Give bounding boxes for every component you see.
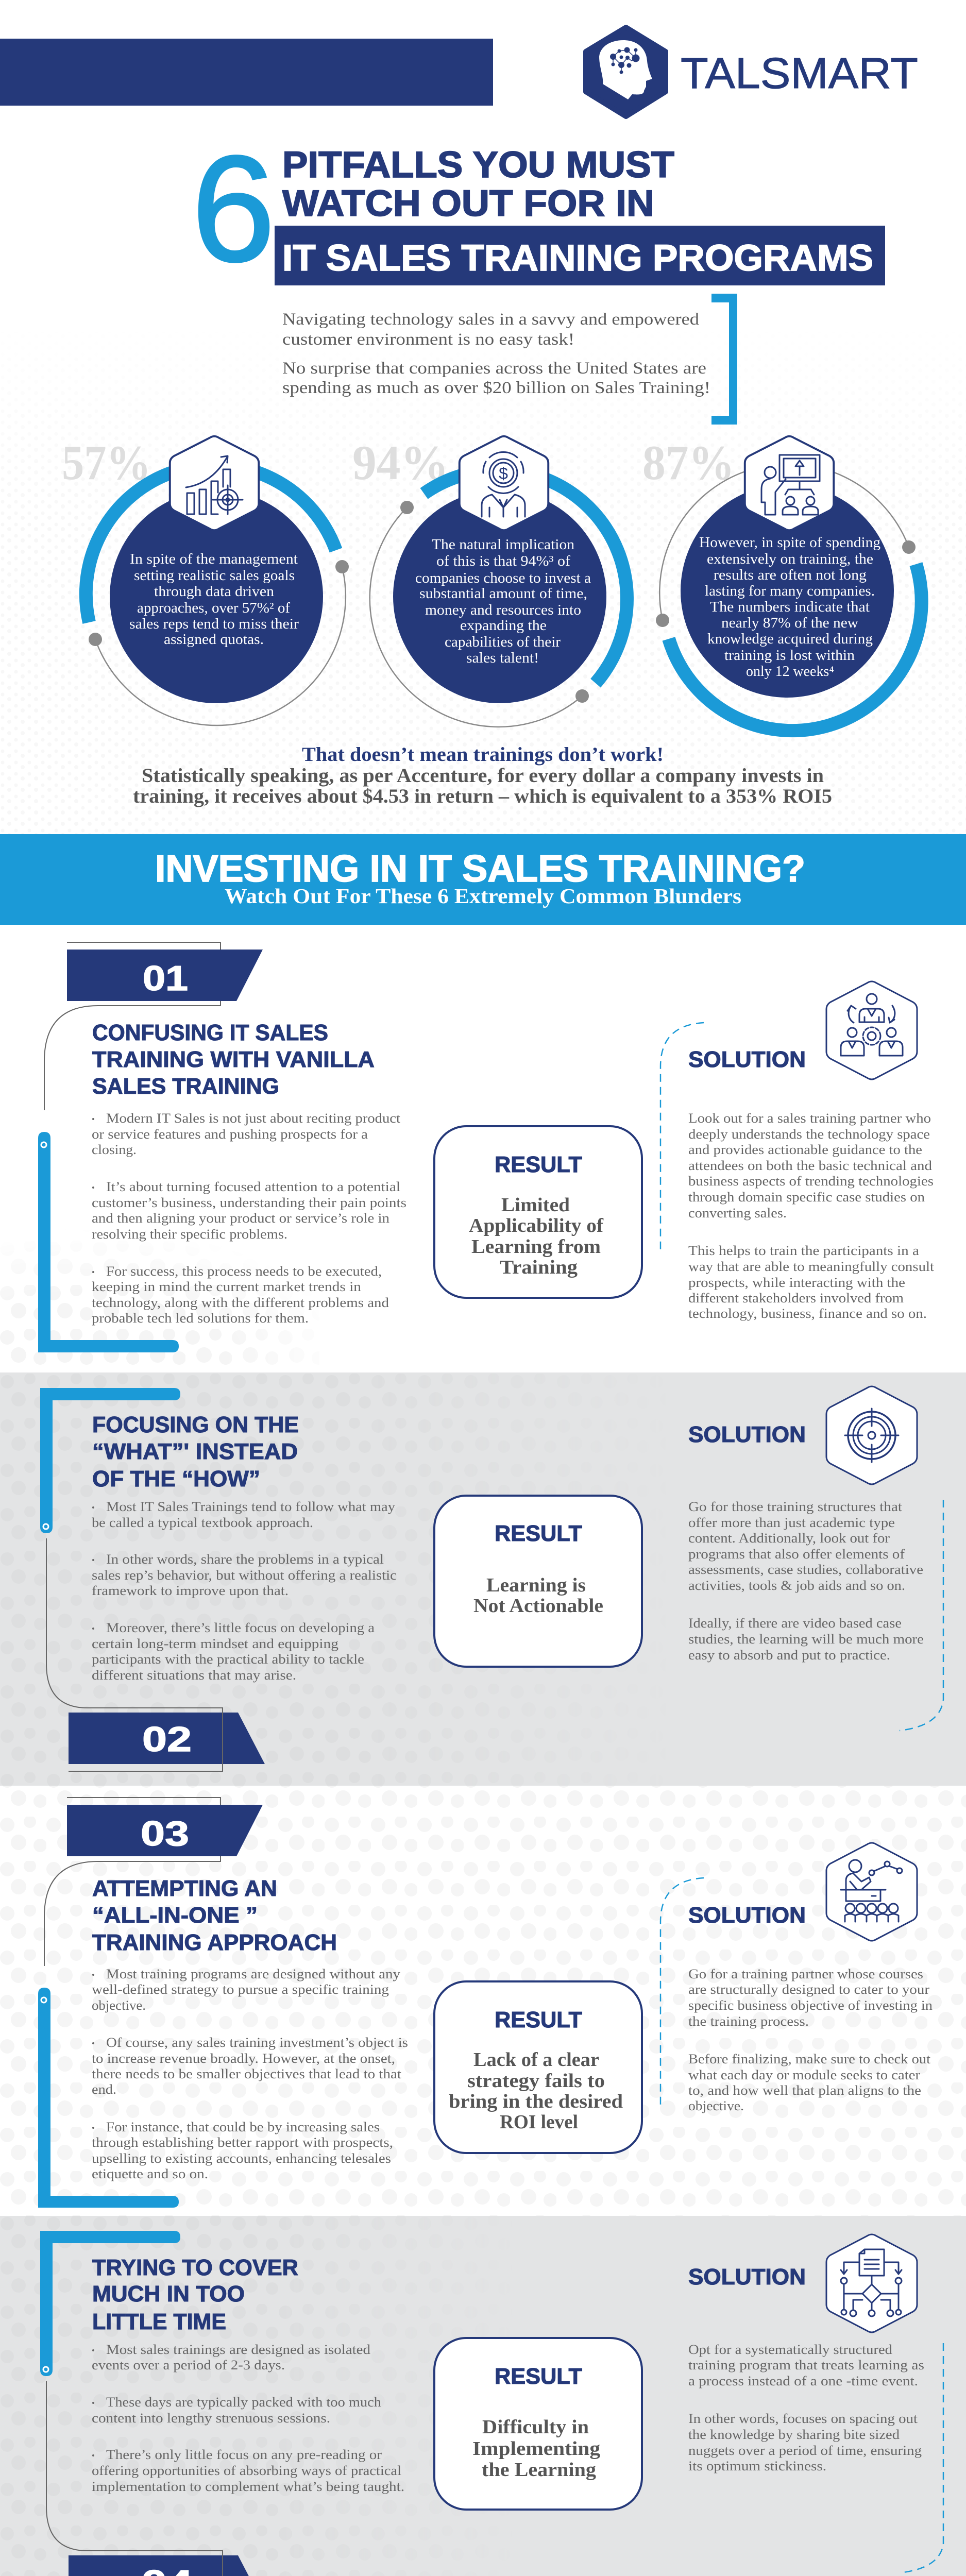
- heading: TRAINING APPROACH: [92, 1930, 337, 1955]
- solution text: Look out for a sales training partner who: [688, 1110, 931, 1126]
- circle text: training is lost within: [724, 647, 855, 664]
- result card: ROI level: [500, 2111, 578, 2133]
- result card: [434, 1496, 642, 1667]
- heading: “ALL-IN-ONE ”: [92, 1903, 258, 1928]
- icon: trainer and audience: [826, 1843, 917, 1941]
- big numeral 6: 6: [192, 125, 275, 293]
- stat circle: 57%: [62, 435, 349, 725]
- number banner 03: [44, 1798, 263, 1966]
- circle text: However, in spite of spending: [699, 534, 880, 551]
- solution text: Ideally, if there are video based case: [688, 1615, 902, 1631]
- solution text: studies, the learning will be much more: [688, 1631, 924, 1647]
- solution text: In other words, focuses on spacing out: [688, 2411, 918, 2426]
- circle text: of this is that 94%³ of: [436, 553, 570, 569]
- solution text: [688, 1110, 935, 1321]
- problem text: different situations that may arise.: [92, 1667, 296, 1683]
- problem text: In other words, share the problems in a typical: [106, 1551, 384, 1567]
- number banner 02: [46, 1538, 265, 1771]
- problem text: There’s only little focus on any pre-reading or: [106, 2447, 382, 2462]
- heading: [92, 1020, 375, 1099]
- solution text: business aspects of trending technologies: [688, 1173, 934, 1189]
- blue bracket: [40, 2231, 180, 2376]
- icon: flowchart: [826, 2234, 917, 2332]
- problem text: These days are typically packed with too much: [106, 2394, 381, 2410]
- title highlight bar: [275, 226, 885, 285]
- blue bracket: [38, 1988, 179, 2208]
- result card: RESULT: [495, 1152, 582, 1177]
- problem text: objective.: [92, 1997, 146, 2013]
- solution text: nuggets over a period of time, ensuring: [688, 2443, 922, 2458]
- problem text: [92, 1499, 397, 1683]
- circle text: approaches, over 57%² of: [137, 600, 290, 616]
- solution text: Go for those training structures that: [688, 1499, 903, 1514]
- title block: [192, 125, 885, 293]
- blue bracket: [38, 1132, 179, 1352]
- solution text: [688, 2342, 924, 2473]
- solution text: and provides actionable guidance to the: [688, 1142, 922, 1157]
- solution text: objective.: [688, 2098, 744, 2113]
- problem text: sales rep’s behavior, but without offering a realistic: [92, 1567, 397, 1583]
- circle text: results are often not long: [714, 567, 867, 583]
- dashed connector: [900, 2343, 943, 2573]
- solution text: deeply understands the technology space: [688, 1126, 930, 1142]
- solution text: [688, 1966, 933, 2113]
- intro text: No surprise that companies across the United States are: [282, 359, 706, 378]
- intro text: spending as much as over $20 billion on Sales Training!: [282, 379, 710, 397]
- blue bracket: [711, 294, 737, 425]
- solution text: Go for a training partner whose courses: [688, 1966, 923, 1981]
- circle text: knowledge acquired during: [707, 631, 873, 647]
- solution text: what each day or module seeks to cater: [688, 2067, 920, 2082]
- number banner 02: 02: [142, 1720, 192, 1759]
- heading: [92, 2255, 298, 2334]
- number banner 04: [46, 2381, 265, 2576]
- dashed connector: [660, 1023, 704, 1254]
- problem text: implementation to complement what’s being taught.: [92, 2479, 404, 2494]
- blue section banner: INVESTING IN IT SALES TRAINING?: [155, 848, 805, 890]
- result card: RESULT: [495, 1521, 582, 1546]
- solution text: the training process.: [688, 2013, 809, 2029]
- blue section banner: Watch Out For These 6 Extremely Common Blunders: [225, 884, 741, 908]
- logo: TalSmart: [586, 27, 918, 116]
- solution text: training program that treats learning as: [688, 2357, 924, 2372]
- solution text: are structurally designed to cater to your: [688, 1981, 929, 1997]
- problem text: probable tech led solutions for them.: [92, 1310, 309, 1326]
- result card: Lack of a clear: [473, 2049, 599, 2071]
- dashed connector: [900, 1500, 943, 1731]
- solution text: a process instead of a one -time event.: [688, 2373, 918, 2388]
- result card: Difficulty in: [482, 2416, 589, 2438]
- solution text: This helps to train the participants in a: [688, 1243, 919, 1258]
- problem text: Most IT Sales Trainings tend to follow what may: [106, 1499, 396, 1514]
- circle text: lasting for many companies.: [705, 583, 875, 599]
- statement: trainings do work: training, it receives about $4.53 in return – which is equivalent to a 353% ROI5: [133, 785, 832, 807]
- circle text: sales talent!: [466, 650, 539, 666]
- problem text: Of course, any sales training investment’s object is: [106, 2035, 408, 2050]
- problem text: content into lengthy strenuous sessions.: [92, 2410, 330, 2426]
- heading: “WHAT”' INSTEAD: [92, 1439, 298, 1464]
- solution text: [688, 1499, 924, 1663]
- solution heading: SOLUTION: [688, 1422, 806, 1447]
- circle text: setting realistic sales goals: [134, 567, 295, 584]
- solution text: offer more than just academic type: [688, 1515, 895, 1530]
- circle text: [415, 536, 591, 666]
- problem text: there needs to be smaller objectives that lead to that: [92, 2066, 402, 2081]
- circle text: [699, 534, 880, 680]
- circle text: [129, 551, 299, 648]
- problem text: It’s about turning focused attention to a potential: [106, 1179, 400, 1194]
- problem text: customer’s business, understanding their pain points: [92, 1195, 406, 1210]
- problem text: Moreover, there’s little focus on developing a: [106, 1620, 375, 1635]
- solution heading: SOLUTION: [688, 1047, 806, 1072]
- result card: Not Actionable: [473, 1595, 603, 1617]
- stat circle: 87%: [642, 435, 922, 731]
- title highlight bar: IT SALES TRAINING PROGRAMS: [282, 238, 873, 279]
- circle text: substantial amount of time,: [419, 585, 587, 602]
- solution text: prospects, while interacting with the: [688, 1275, 905, 1290]
- intro text: [282, 310, 710, 397]
- solution heading: SOLUTION: [688, 1903, 806, 1928]
- solution text: easy to absorb and put to practice.: [688, 1647, 890, 1663]
- statement: trainings do work: Statistically speaking, as per Accenture, for every dollar a company invests in: [142, 765, 824, 787]
- problem text: For success, this process needs to be executed,: [106, 1263, 382, 1279]
- result card: [434, 1981, 642, 2153]
- heading: ATTEMPTING AN: [92, 1876, 277, 1901]
- solution text: technology, business, finance and so on.: [688, 1306, 927, 1321]
- result card: bring in the desired: [449, 2091, 623, 2112]
- problem text: framework to improve upon that.: [92, 1583, 289, 1598]
- problem text: technology, along with the different problems and: [92, 1295, 389, 1310]
- result card: the Learning: [482, 2459, 596, 2481]
- icon: chart with target: [170, 436, 259, 530]
- problem text: Modern IT Sales is not just about reciting product: [106, 1110, 401, 1126]
- circle text: In spite of the management: [130, 551, 298, 567]
- problem text: participants with the practical ability to tackle: [92, 1651, 364, 1667]
- icon: target: [826, 1386, 917, 1484]
- problem text: through establishing better rapport with prospects,: [92, 2134, 393, 2150]
- solution text: the knowledge by sharing bite sized: [688, 2427, 900, 2442]
- number banner 01: 01: [143, 959, 188, 998]
- circle text: companies choose to invest a: [415, 570, 591, 586]
- result card: Learning from: [471, 1236, 601, 1258]
- problem text: well-defined strategy to pursue a specific training: [92, 1981, 389, 1997]
- number banner 03: 03: [141, 1814, 189, 1853]
- icon: dollar head person: $: [499, 464, 508, 483]
- solution text: Before finalizing, make sure to check out: [688, 2051, 931, 2066]
- result card: strategy fails to: [467, 2070, 605, 2092]
- stat circle: 94%: [352, 435, 627, 727]
- solution text: content. Additionally, look out for: [688, 1530, 890, 1546]
- heading: [92, 1876, 337, 1955]
- panel: pitfall 02: [0, 1372, 966, 1786]
- statement: trainings do work: [133, 743, 832, 807]
- panel: pitfall 03: [38, 1798, 933, 2208]
- result card: RESULT: [495, 2007, 582, 2032]
- solution text: to, and how well that plan aligns to the: [688, 2082, 921, 2098]
- circle text: expanding the: [460, 617, 547, 634]
- heading: MUCH IN TOO: [92, 2281, 245, 2307]
- result card: Limited: [501, 1194, 570, 1216]
- percent 57: 57%: [62, 435, 151, 490]
- percent 94: 94%: [352, 435, 449, 490]
- result card: Implementing: [472, 2438, 600, 2460]
- statement: trainings do work: That doesn’t mean trainings don’t work!: [302, 743, 664, 766]
- circle text: The natural implication: [432, 536, 575, 553]
- circle text: nearly 87% of the new: [721, 615, 858, 631]
- panel: pitfall 04: [0, 2216, 966, 2576]
- solution text: Opt for a systematically structured: [688, 2342, 892, 2357]
- problem text: to increase revenue broadly. However, at the onset,: [92, 2050, 395, 2066]
- problem text: etiquette and so on.: [92, 2166, 208, 2181]
- circle text: only 12 weeks⁴: [746, 663, 834, 680]
- problem text: events over a period of 2-3 days.: [92, 2357, 285, 2372]
- problem text: end.: [92, 2081, 116, 2097]
- solution text: way that are able to meaningfully consult: [688, 1259, 935, 1274]
- number banner 01: [44, 942, 263, 1110]
- logo: TalSmart: TALSMART: [681, 49, 918, 97]
- problem text: be called a typical textbook approach.: [92, 1515, 313, 1530]
- circle text: capabilities of their: [445, 634, 561, 650]
- problem text: [92, 1966, 408, 2181]
- heading: CONFUSING IT SALES: [92, 1020, 328, 1045]
- intro text: Navigating technology sales in a savvy and empowered: [282, 310, 700, 329]
- title line 2: WATCH OUT FOR IN: [282, 183, 654, 224]
- circle text: extensively on training, the: [707, 551, 873, 567]
- circle text: assigned quotas.: [164, 631, 264, 648]
- result card: Learning is: [486, 1574, 586, 1596]
- result card: Applicability of: [469, 1215, 604, 1236]
- problem text: resolving their specific problems.: [92, 1226, 287, 1242]
- heading: TRYING TO COVER: [92, 2255, 298, 2280]
- percent 87: 87%: [642, 435, 735, 490]
- problem text: keeping in mind the current market trends in: [92, 1279, 361, 1294]
- problem text: or service features and pushing prospects for a: [92, 1126, 368, 1142]
- circle text: sales reps tend to miss their: [129, 616, 299, 632]
- problem text: For instance, that could be by increasing sales: [106, 2119, 380, 2134]
- intro text: customer environment is no easy task!: [282, 330, 574, 349]
- blue section banner: [0, 834, 966, 925]
- problem text: certain long-term mindset and equipping: [92, 1636, 338, 1651]
- result card: RESULT: [495, 2364, 582, 2389]
- icon: team with gear: [826, 981, 917, 1079]
- solution text: through domain specific case studies on: [688, 1189, 925, 1205]
- solution text: assessments, case studies, collaborative: [688, 1562, 923, 1577]
- circle text: through data driven: [154, 583, 275, 600]
- problem text: closing.: [92, 1142, 137, 1157]
- problem text: Most sales trainings are designed as isolated: [106, 2342, 370, 2357]
- header bar: [0, 39, 493, 106]
- problem text: [92, 1110, 406, 1326]
- solution text: different stakeholders involved from: [688, 1290, 904, 1306]
- solution text: specific business objective of investing in: [688, 1997, 933, 2013]
- solution text: its optimum stickiness.: [688, 2458, 826, 2473]
- problem text: Most training programs are designed without any: [106, 1966, 401, 1981]
- circle text: The numbers indicate that: [710, 599, 870, 615]
- result card: Training: [500, 1257, 578, 1278]
- heading: SALES TRAINING: [92, 1074, 279, 1099]
- panel: pitfall 01: [38, 942, 935, 1352]
- result card: [434, 1126, 642, 1298]
- solution heading: SOLUTION: [688, 2264, 806, 2290]
- solution text: programs that also offer elements of: [688, 1546, 905, 1562]
- icon: dollar head person: [460, 436, 548, 530]
- solution text: converting sales.: [688, 1205, 787, 1221]
- title line 1: PITFALLS YOU MUST: [282, 145, 674, 185]
- heading: LITTLE TIME: [92, 2309, 226, 2334]
- result card: [434, 2338, 642, 2510]
- blue bracket: [40, 1388, 180, 1533]
- heading: TRAINING WITH VANILLA: [92, 1047, 375, 1072]
- problem text: upselling to existing accounts, enhancing telesales: [92, 2150, 391, 2166]
- problem text: and then aligning your product or service’s role in: [92, 1210, 389, 1226]
- problem text: offering opportunities of absorbing ways of practical: [92, 2463, 401, 2478]
- circle text: money and resources into: [425, 602, 581, 618]
- solution text: activities, tools & job aids and so on.: [688, 1578, 905, 1593]
- solution text: attendees on both the basic technical and: [688, 1158, 932, 1173]
- icon: presenter with board: [745, 436, 834, 530]
- problem text: [92, 2342, 404, 2494]
- heading: OF THE “HOW”: [92, 1466, 260, 1492]
- dashed connector: [660, 1878, 704, 2109]
- heading: [92, 1412, 299, 1492]
- heading: FOCUSING ON THE: [92, 1412, 299, 1437]
